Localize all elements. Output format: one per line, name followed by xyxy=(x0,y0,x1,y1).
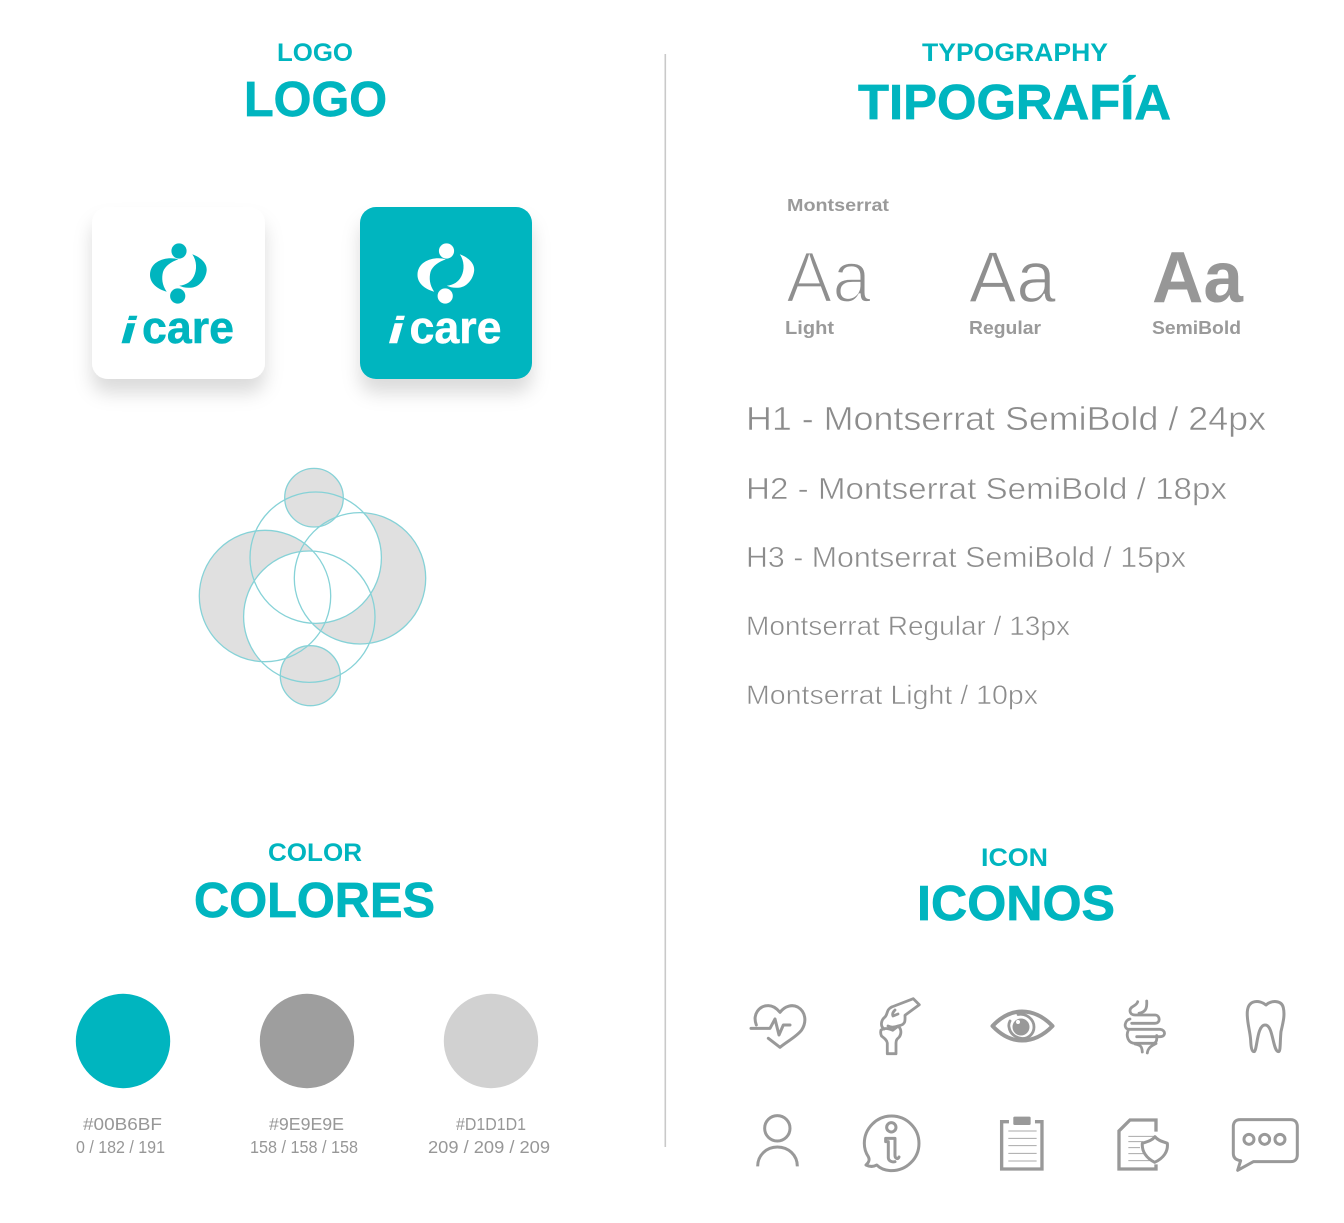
icon: intestine xyxy=(1125,1001,1164,1053)
icon: knee joint xyxy=(881,999,919,1054)
icon: heart pulse xyxy=(751,1006,805,1047)
specimen: light: Aa xyxy=(786,238,872,318)
specimen: semibold: SemiBold xyxy=(1152,318,1241,338)
type scale list: Montserrat Light / 10px xyxy=(746,680,1039,710)
heading: icon: ICON xyxy=(981,844,1048,872)
icon group left xyxy=(751,1006,1042,1171)
swatch: light gray: #D1D1D1 xyxy=(456,1114,526,1134)
swatch: teal: #00B6BF xyxy=(83,1114,162,1134)
type scale list xyxy=(746,400,1267,710)
specimen: regular: Regular xyxy=(969,318,1041,338)
type scale list: H3 - Montserrat SemiBold / 15px xyxy=(746,542,1187,574)
icon: person xyxy=(758,1116,797,1166)
wordmark: icare teal: i xyxy=(121,310,137,351)
divider xyxy=(664,54,666,1147)
wordmark: icare teal: care xyxy=(142,302,234,353)
swatch: light gray: 209 / 209 / 209 xyxy=(428,1137,550,1157)
wordmark: icare white: care xyxy=(410,302,502,353)
icon group right xyxy=(1119,1002,1297,1170)
icon: eye xyxy=(992,1012,1052,1040)
swatch: teal xyxy=(76,994,170,1157)
heading: color xyxy=(194,839,435,928)
icon: icare symbol teal xyxy=(150,243,207,304)
icon: chat bubble xyxy=(1233,1120,1297,1170)
type scale list: H1 - Montserrat SemiBold / 24px xyxy=(746,400,1267,437)
icon: icare symbol white xyxy=(418,243,474,304)
heading: icon: ICONOS xyxy=(917,877,1115,931)
heading: typography: TYPOGRAPHY xyxy=(922,39,1108,67)
swatch: light gray xyxy=(428,994,550,1157)
swatch: gray: 158 / 158 / 158 xyxy=(250,1137,358,1157)
icon: tooth xyxy=(1247,1002,1284,1052)
swatch: gray xyxy=(250,994,358,1157)
font name: Montserrat xyxy=(787,195,889,215)
specimen: light: Light xyxy=(785,318,834,338)
heading: color: COLORES xyxy=(194,874,435,928)
heading: logo xyxy=(244,39,387,127)
logo construction circles xyxy=(199,468,426,706)
logo card: white xyxy=(92,207,265,379)
heading: logo: LOGO xyxy=(244,73,387,127)
icon: info bubble xyxy=(864,1116,919,1171)
specimen: semibold: Aa xyxy=(1152,238,1244,318)
icon: clipboard xyxy=(1002,1117,1042,1169)
type scale list: Montserrat Regular / 13px xyxy=(746,611,1071,641)
swatch: gray: #9E9E9E xyxy=(269,1114,344,1134)
type scale list: H2 - Montserrat SemiBold / 18px xyxy=(746,471,1228,506)
logo card: teal xyxy=(360,207,532,379)
heading: typography xyxy=(858,39,1171,130)
heading: color: COLOR xyxy=(268,839,362,867)
specimen: regular: Aa xyxy=(969,238,1057,318)
icon: document shield xyxy=(1119,1120,1167,1169)
heading: logo: LOGO xyxy=(277,39,353,67)
swatch: teal: 0 / 182 / 191 xyxy=(76,1137,165,1157)
heading: typography: TIPOGRAFÍA xyxy=(858,76,1171,130)
heading: icon xyxy=(917,844,1115,931)
wordmark: icare white: i xyxy=(388,310,405,351)
